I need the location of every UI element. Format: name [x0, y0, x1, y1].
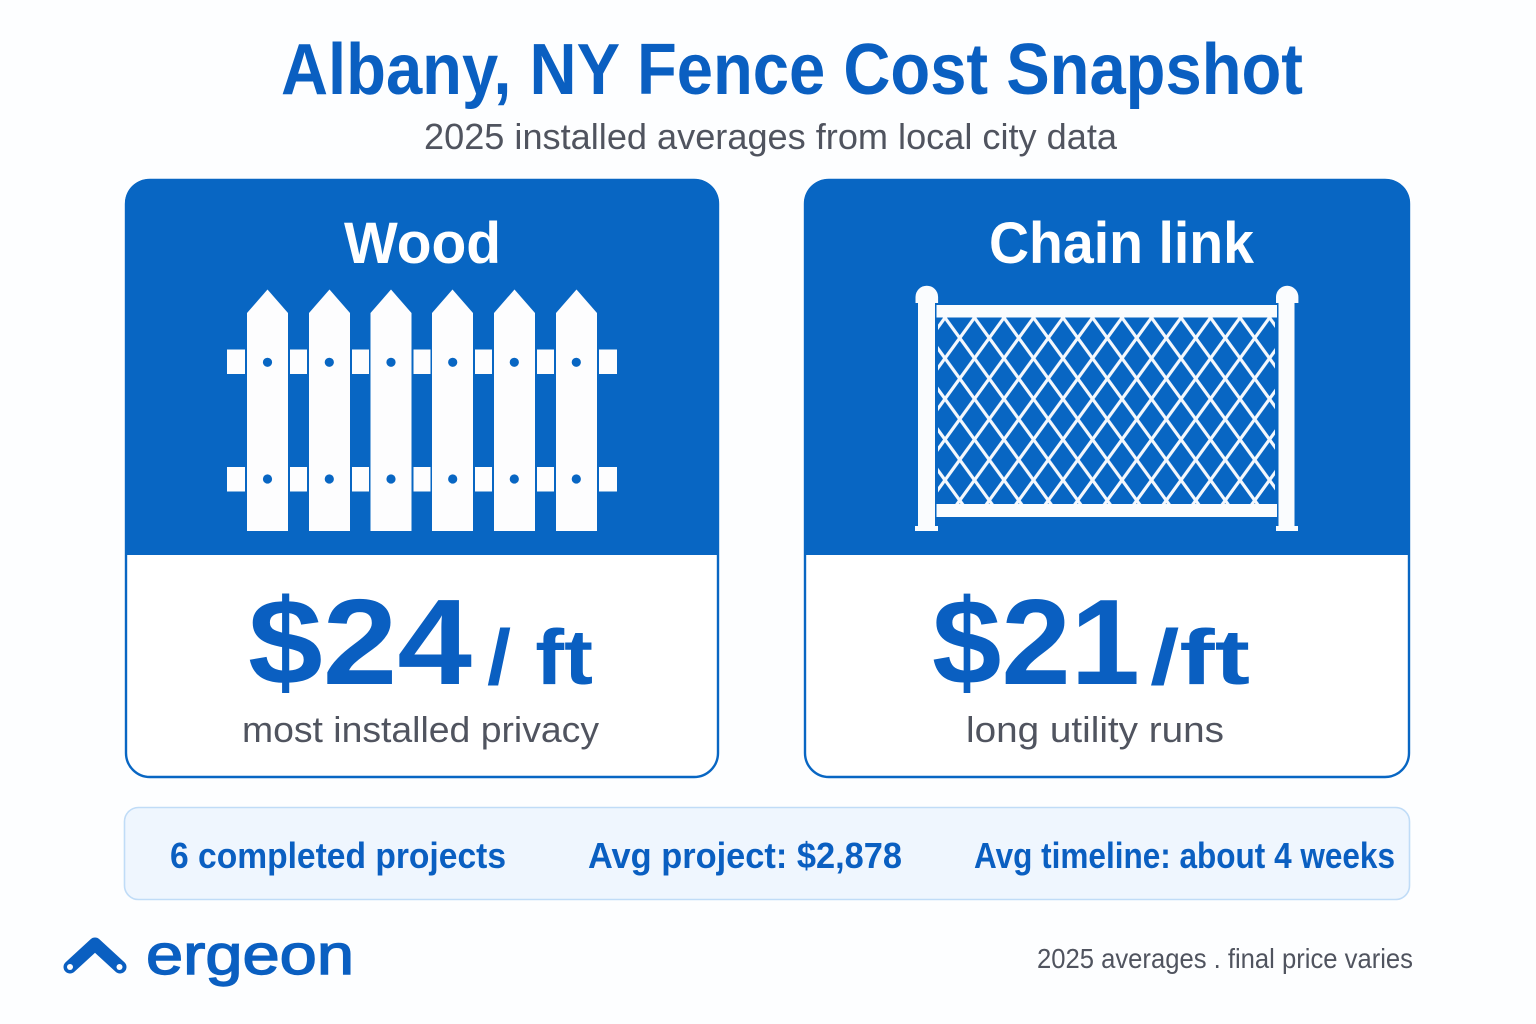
subtitle: 2025 installed averages from local city data — [424, 116, 1118, 157]
stat: projects: 6 completed projects — [170, 835, 506, 876]
footnote: 2025 averages . final price varies — [1037, 943, 1413, 974]
wood caption: most installed privacy — [242, 709, 599, 750]
wordmark: ergeon — [146, 923, 354, 987]
chain link unit: /ft — [1150, 613, 1250, 701]
card outline — [126, 180, 718, 777]
bar background — [124, 808, 1410, 900]
stat: timeline: Avg timeline: about 4 weeks — [974, 835, 1395, 876]
chain link heading: Chain link — [989, 211, 1255, 276]
chain link caption: long utility runs — [966, 709, 1224, 750]
wood heading: Wood — [344, 211, 501, 276]
card outline — [805, 180, 1409, 777]
icon: roof chevron — [67, 944, 122, 970]
wood unit: / ft — [487, 613, 593, 701]
icon: chain link fence — [915, 286, 1298, 531]
chain link price: $21 — [932, 574, 1140, 710]
wood price: $24 — [248, 574, 472, 710]
card header — [125, 179, 719, 555]
title: Albany, NY Fence Cost Snapshot — [281, 30, 1303, 110]
icon: picket fence — [227, 290, 617, 531]
logo: ergeon — [67, 923, 354, 987]
stats bar — [124, 808, 1410, 900]
stat: average project: Avg project: $2,878 — [588, 835, 902, 876]
panel: chain link — [804, 179, 1410, 777]
panel: wood — [125, 179, 719, 777]
card header — [804, 179, 1410, 555]
